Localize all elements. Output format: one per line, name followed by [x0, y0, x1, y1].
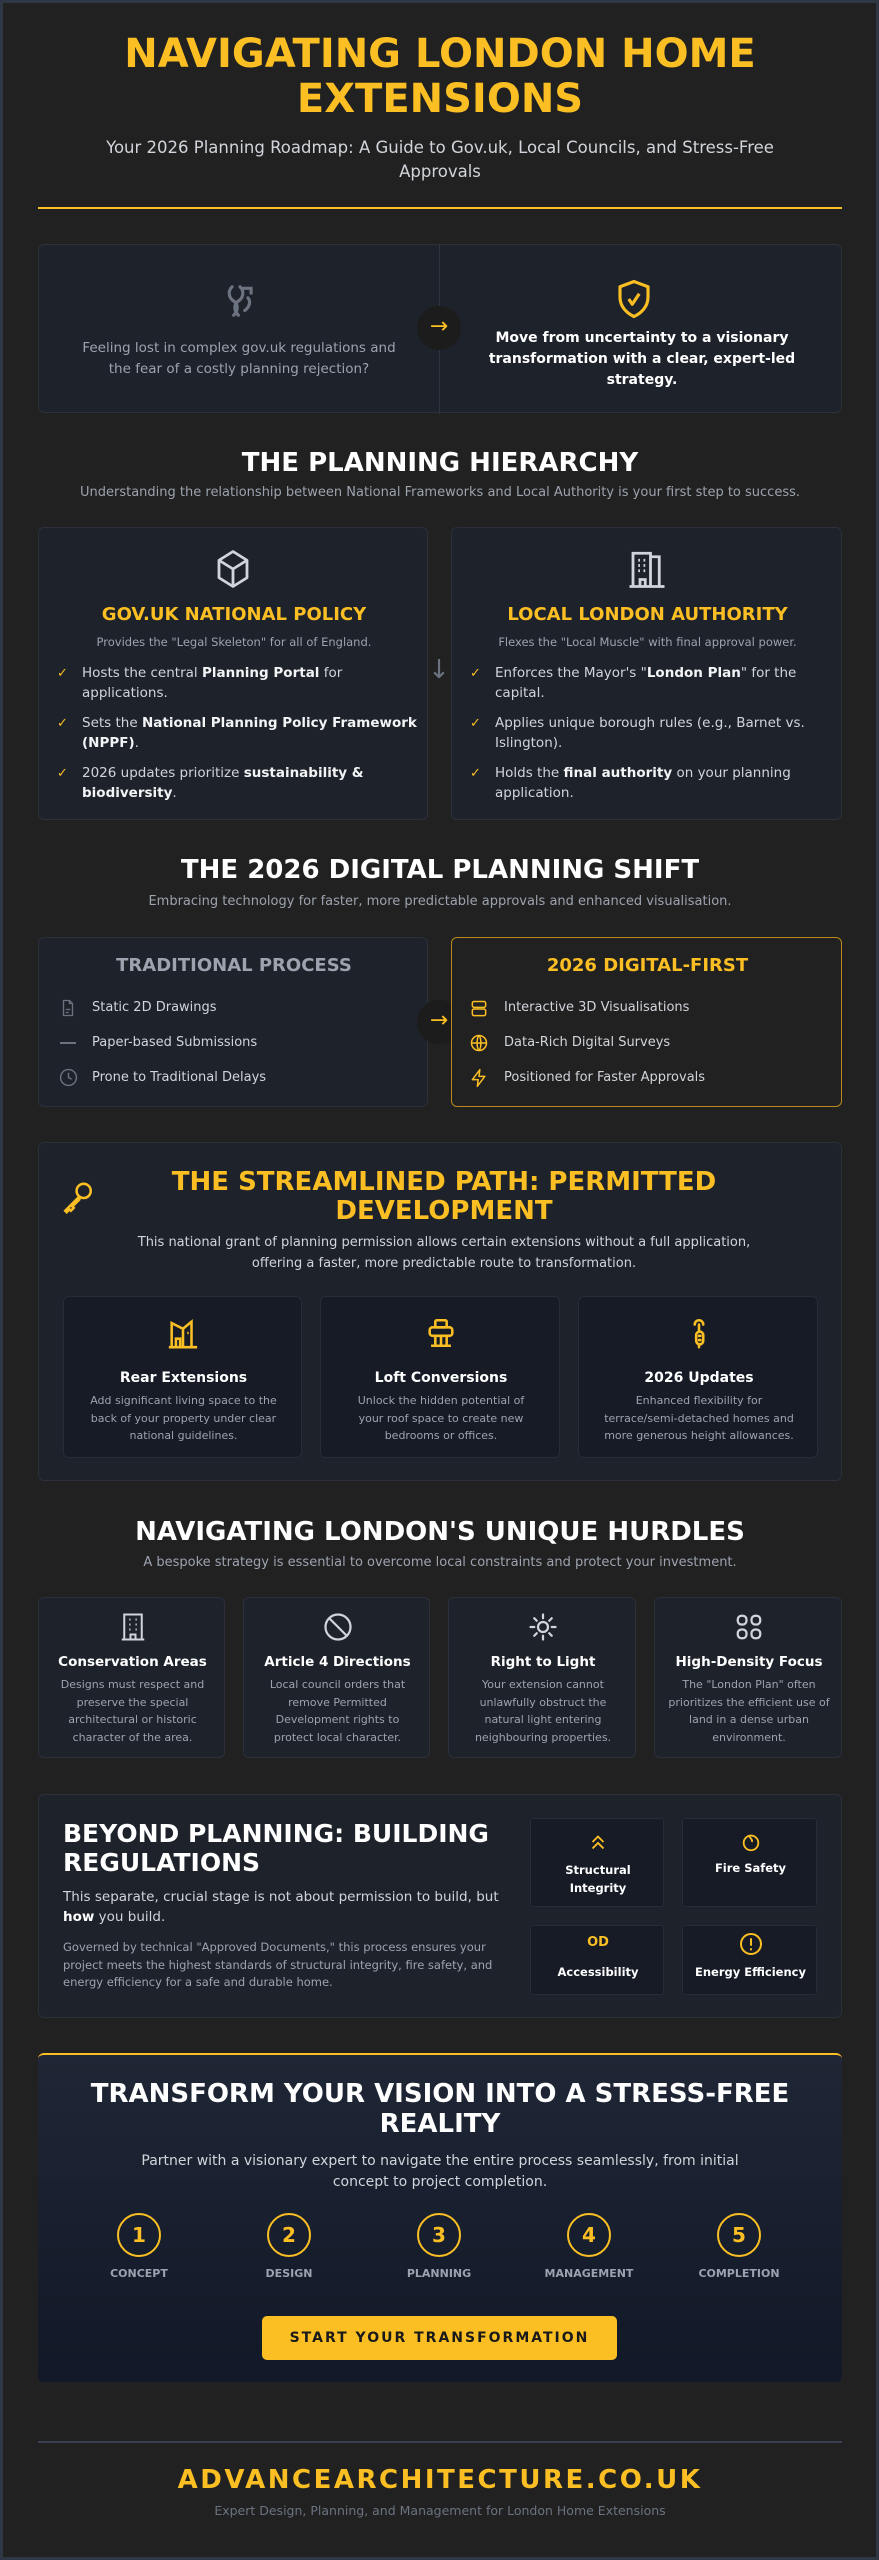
card: right to light	[448, 1597, 636, 1758]
steps: 3	[432, 2223, 446, 2247]
icon: document	[62, 1000, 74, 1016]
panel: gov.uk national policy: 2026 updates prioritize sustainability & biodiversity.	[82, 765, 364, 801]
panel: traditional process: Static 2D Drawings	[92, 1000, 217, 1015]
panel: gov.uk national policy: Provides the "Legal Skeleton" for all of England.	[97, 635, 371, 649]
card: loft conversions: Loft Conversions	[375, 1370, 507, 1386]
tile: energy: Energy Efficiency	[695, 1965, 806, 1979]
arrow: →	[430, 1008, 448, 1033]
steps: COMPLETION	[698, 2267, 780, 2280]
icon: clock	[60, 1068, 78, 1086]
tile: structural: Structural	[565, 1863, 631, 1877]
panel: 2026 digital-first: Data-Rich Digital Surveys	[504, 1035, 670, 1050]
text: problem: the fear of a costly planning rejection?	[109, 361, 369, 377]
text: problem: Feeling lost in complex gov.uk regulations and	[82, 340, 396, 356]
card: rear extensions: Add significant living space to the back of your property under clear national guidelines.	[90, 1394, 277, 1442]
panel: 2026 digital-first	[451, 937, 842, 1107]
panel: call to action: TRANSFORM YOUR VISION INTO A STRESS-FREE REALITY	[91, 2079, 789, 2139]
title	[124, 31, 756, 122]
button: START YOUR TRANSFORMATION	[290, 2330, 589, 2346]
tile: fire	[682, 1818, 817, 1907]
heading: london hurdles: NAVIGATING LONDON'S UNIQUE HURDLES	[135, 1517, 745, 1547]
steps	[110, 2213, 780, 2280]
panel: local london authority: Enforces the Mayor's "London Plan" for the capital.	[495, 665, 796, 701]
icon: globe	[470, 1034, 488, 1052]
icon: 3d	[472, 1000, 486, 1016]
icon: tangled	[228, 285, 253, 317]
steps: PLANNING	[407, 2267, 471, 2280]
heading: digital shift: THE 2026 DIGITAL PLANNING SHIFT	[181, 855, 699, 885]
panel: local london authority: LOCAL LONDON AUTHORITY	[507, 604, 788, 625]
panel: permitted development: DEVELOPMENT	[335, 1196, 553, 1226]
steps: DESIGN	[266, 2267, 312, 2280]
panel: gov.uk national policy: ✓	[57, 666, 68, 681]
arrow: down: ↓	[428, 655, 450, 685]
panel: building regulations	[38, 1794, 842, 2018]
panel: call to action	[38, 2053, 842, 2382]
title: EXTENSIONS	[297, 76, 583, 122]
icon: bolt	[472, 1068, 486, 1088]
panel: gov.uk national policy: GOV.UK NATIONAL POLICY	[102, 604, 366, 625]
card: conservation areas	[38, 1597, 225, 1758]
panel: traditional process: Paper-based Submissions	[92, 1035, 257, 1050]
panel: gov.uk national policy: Hosts the central Planning Portal for applications.	[82, 665, 342, 701]
panel: 2026 digital-first: Interactive 3D Visualisations	[504, 1000, 689, 1015]
steps: 4	[582, 2223, 596, 2247]
tile: structural: Integrity	[570, 1881, 626, 1895]
card: 2026 updates: terrace/semi-detached homes and more generous height allowances.	[604, 1412, 794, 1442]
panel: building regulations: Governed by technical "Approved Documents," this process ensures your project meets the highest standards of structural integrity, fire safety, and energy efficiency for a safe and durable home.	[63, 1940, 492, 1989]
card: high density: High-Density Focus	[676, 1654, 822, 1670]
panel: permitted development: This national grant of planning permission allows certain extensions without a full application, offering a faster, more predictable route to transformation.	[138, 1235, 750, 1271]
icon: cube	[218, 550, 248, 588]
card: loft conversions: Unlock the hidden potential of your roof space to create new bedrooms or offices.	[358, 1394, 524, 1442]
subtitle: Your 2026 Planning Roadmap: A Guide to Gov.uk, Local Councils, and Stress-Free Approvals	[106, 138, 774, 181]
card: right to light: Your extension cannot unlawfully obstruct the natural light entering neighbouring properties.	[475, 1678, 611, 1744]
steps: MANAGEMENT	[545, 2267, 633, 2280]
panel: local london authority: Applies unique borough rules (e.g., Barnet vs. Islington).	[495, 715, 805, 751]
panel: local london authority: ✓	[470, 716, 481, 731]
panel: local london authority: Flexes the "Local Muscle" with final approval power.	[498, 635, 797, 649]
panel: traditional process: TRADITIONAL PROCESS	[116, 955, 352, 976]
panel: gov.uk national policy: Sets the National Planning Policy Framework (NPPF).	[82, 715, 417, 751]
panel: call to action: Partner with a visionary expert to navigate the entire process seamlessly, from initial concept to project completion.	[141, 2153, 739, 2190]
card: conservation areas: Conservation Areas	[58, 1654, 207, 1670]
heading: planning hierarchy: THE PLANNING HIERARCHY	[242, 448, 638, 478]
tile: accessibility: Accessibility	[557, 1965, 639, 1979]
tile: energy	[682, 1925, 817, 1995]
text: A bespoke strategy is essential to overcome local constraints and protect your investment.	[143, 1555, 737, 1570]
panel: hero problem/solution	[38, 244, 842, 413]
text: Understanding the relationship between National Frameworks and Local Authority is your first step to success.	[80, 485, 800, 500]
arrow	[417, 306, 461, 350]
panel: permitted development	[38, 1142, 842, 1481]
card: article 4	[243, 1597, 430, 1758]
steps: 1	[132, 2223, 146, 2247]
panel: local london authority: ✓	[470, 766, 481, 781]
card: rear extensions	[63, 1296, 302, 1458]
card: high density	[654, 1597, 842, 1758]
icon: shield check	[618, 280, 650, 318]
panel: 2026 digital-first: Positioned for Faster Approvals	[504, 1070, 705, 1085]
card: conservation areas: Designs must respect and preserve the special architectural or historic character of the area.	[61, 1678, 204, 1744]
card: loft conversions	[320, 1296, 560, 1458]
card: right to light: Right to Light	[491, 1654, 595, 1670]
card: rear extensions: Rear Extensions	[120, 1370, 247, 1386]
tile: accessibility: OD	[587, 1935, 609, 1950]
panel: gov.uk national policy: ✓	[57, 766, 68, 781]
button	[262, 2316, 617, 2360]
panel: local london authority	[451, 527, 842, 820]
title: NAVIGATING LONDON HOME	[124, 31, 756, 77]
tile: fire: Fire Safety	[715, 1861, 786, 1875]
card: 2026 updates	[578, 1296, 818, 1458]
card: high density: The "London Plan" often prioritizes the efficient use of land in a dense urban environment.	[668, 1678, 830, 1744]
panel: building regulations: BEYOND PLANNING: BUILDING REGULATIONS	[63, 1819, 489, 1877]
tile: accessibility	[530, 1925, 664, 1995]
card: 2026 updates: 2026 Updates	[644, 1370, 754, 1386]
panel: building regulations: This separate, crucial stage is not about permission to build, but how you build.	[63, 1889, 499, 1925]
panel: gov.uk national policy: ✓	[57, 716, 68, 731]
icon: key	[64, 1182, 92, 1214]
panel: local london authority: Holds the final authority on your planning application.	[495, 765, 791, 801]
panel: traditional process: Prone to Traditional Delays	[92, 1070, 266, 1085]
icon: building	[630, 552, 664, 588]
panel: permitted development: THE STREAMLINED PATH: PERMITTED	[172, 1167, 716, 1197]
panel: 2026 digital-first: 2026 DIGITAL-FIRST	[547, 955, 748, 976]
panel: traditional process	[38, 937, 428, 1107]
panel: local london authority: ✓	[470, 666, 481, 681]
card: 2026 updates: Enhanced flexibility for	[636, 1394, 762, 1407]
tile: structural	[530, 1818, 664, 1907]
steps: 2	[282, 2223, 296, 2247]
panel: gov.uk national policy	[38, 527, 428, 820]
card: article 4: Article 4 Directions	[264, 1654, 411, 1670]
footer tagline: Expert Design, Planning, and Management for London Home Extensions	[214, 2503, 666, 2518]
card: article 4: Local council orders that remove Permitted Development rights to protect local character.	[270, 1678, 405, 1744]
steps: CONCEPT	[110, 2267, 168, 2280]
steps: 5	[732, 2223, 746, 2247]
arrow: →	[430, 314, 448, 339]
arrow	[417, 1000, 461, 1044]
text: problem	[82, 340, 396, 377]
text: solution: Move from uncertainty to a visionary transformation with a clear, expert-led strategy.	[489, 330, 795, 388]
footer brand: ADVANCEARCHITECTURE.CO.UK	[178, 2465, 702, 2495]
text: Embracing technology for faster, more predictable approvals and enhanced visualisation.	[148, 894, 732, 909]
